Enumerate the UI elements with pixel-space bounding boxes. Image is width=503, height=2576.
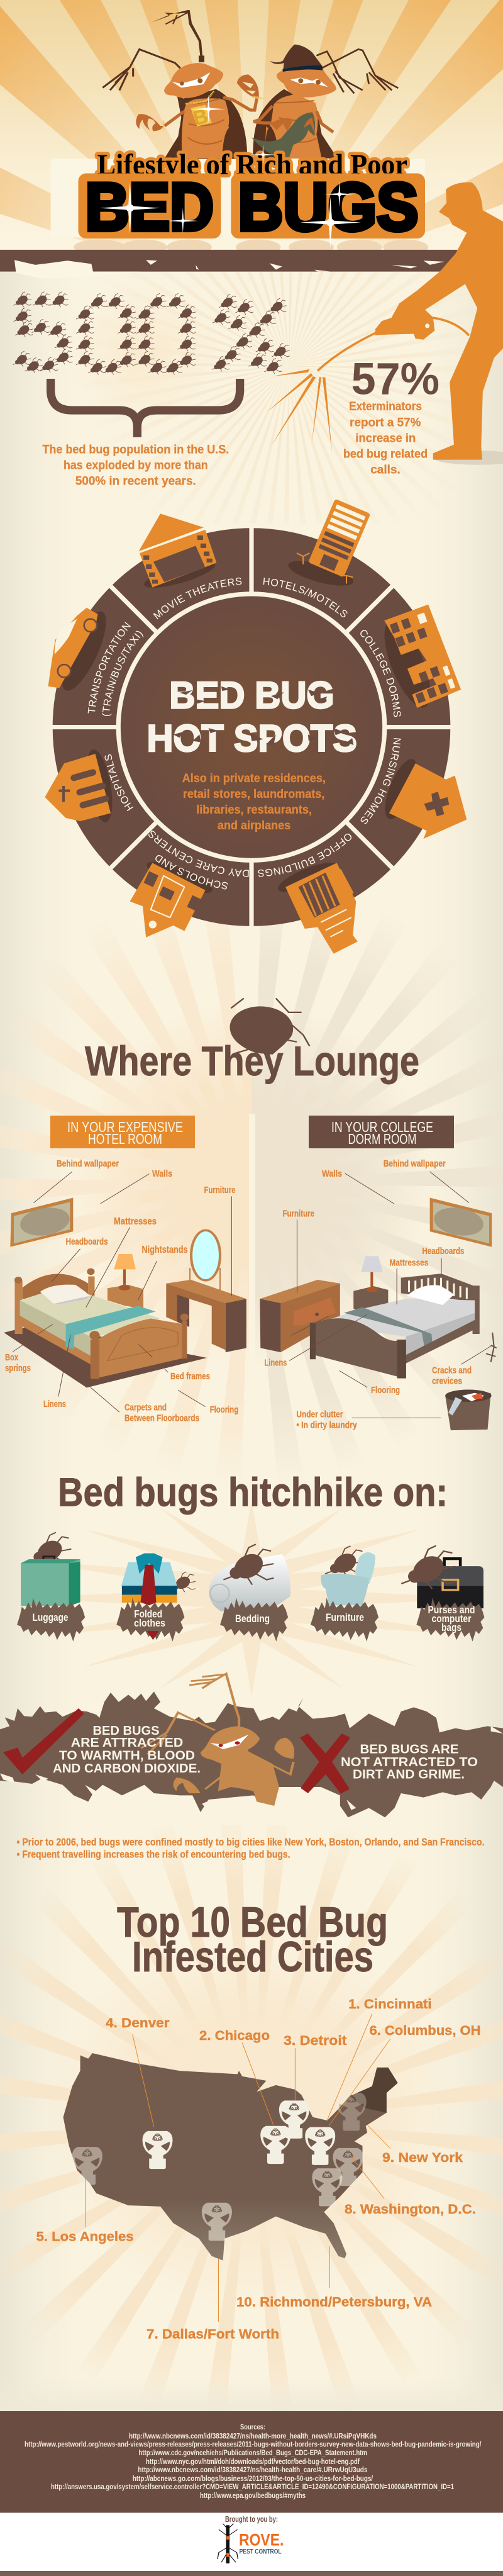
sources panel: [0, 2411, 503, 2513]
city labels: 6. Columbus, OH: [370, 2024, 480, 2038]
item: folded clothes: [121, 1554, 196, 1605]
city labels: 8. Washington, D.C.: [345, 2202, 476, 2217]
hotel room labels: Walls: [152, 1168, 172, 1179]
500 percent made of bugs: [13, 292, 290, 374]
dorm room labels: [264, 1158, 472, 1431]
57 percent caption: Exterminators: [349, 400, 422, 413]
500 percent caption: has exploded by more than: [64, 458, 208, 472]
left room: bed: [14, 1268, 189, 1379]
where they lounge artwork: [4, 999, 497, 1430]
city labels: 9. New York: [382, 2151, 463, 2165]
heading: bed bug hot spots: BED BUG: [169, 675, 334, 717]
wheel ring and hub: [50, 526, 453, 929]
right room: dresser: [260, 1280, 340, 1352]
right room: picture: [430, 1198, 492, 1247]
spray lines: [266, 369, 332, 452]
dorm room labels: Headboards: [422, 1246, 464, 1257]
500 percent caption: 500% in recent years.: [75, 474, 196, 488]
dorm room labels: • In dirty laundry: [296, 1420, 357, 1431]
poor bed bug character: [252, 45, 398, 159]
heading distress marks: [174, 686, 353, 746]
exterminator silhouette: [318, 182, 503, 465]
torn label: [311, 1598, 379, 1642]
title: bed bugs: BED: [86, 169, 214, 244]
dorm room labels: Behind wallpaper: [384, 1158, 446, 1169]
right room: laundry basket: [445, 1389, 492, 1430]
left room: vanity with mirror: [166, 1230, 246, 1352]
label: transportation: (TRAIN/BUS/TAXI): [102, 630, 143, 716]
57 percent stat: 57%: [351, 354, 439, 405]
hotel room labels: Box: [5, 1352, 18, 1363]
sources panel: http://www.cdc.gov/nceh/ehs/Publications/Bed_Bugs_CDC-EPA_Statement.htm: [138, 2450, 367, 2457]
hotel room labels: Mattresses: [114, 1216, 157, 1227]
icon: hospital: [45, 748, 117, 824]
hotel room labels: Furniture: [204, 1185, 235, 1196]
hotel room labels: Flooring: [210, 1404, 238, 1415]
hub caption: libraries, restaurants,: [196, 803, 312, 817]
hitchhike item labels: Purses and: [428, 1604, 475, 1616]
footer strip: [0, 2571, 503, 2576]
hub caption: Also in private residences,: [182, 771, 326, 785]
orange bed bug peeking from band: [141, 1674, 294, 1806]
icon: college dorms: [375, 605, 461, 713]
hitchhike item labels: [33, 1604, 475, 1633]
band tears: [0, 1726, 503, 1810]
rich bed bug character: [102, 10, 263, 159]
icon: movie theater: [138, 513, 218, 593]
torn label: [116, 1598, 184, 1642]
right room leader lines: [289, 1172, 492, 1418]
logo wordmark: ROVE.: [239, 2531, 284, 2550]
maine shading: [350, 2068, 398, 2113]
icon: large bed bug: [230, 999, 309, 1055]
dorm room banner: IN YOUR COLLEGE: [331, 1119, 433, 1135]
hitchhike item labels: bags: [441, 1621, 462, 1633]
hub caption: [182, 771, 326, 832]
hitchhike item labels: Luggage: [33, 1611, 68, 1623]
hotel room labels: Between Floorboards: [124, 1413, 199, 1423]
57 percent caption: report a 57%: [350, 416, 421, 430]
attracted statement: [53, 1724, 201, 1776]
hitchhike item labels: Folded: [134, 1608, 162, 1620]
57 percent caption: calls.: [370, 463, 401, 477]
attracted statement: TO WARMTH, BLOOD: [59, 1749, 195, 1763]
left room: lamp and nightstand: [108, 1254, 143, 1309]
heading: where they lounge: Where They Lounge: [85, 1038, 419, 1084]
sources panel: http://www.nbcnews.com/id/38382427/ns/health-more_health_news/#.URsiPqVHKds: [129, 2433, 377, 2440]
label: hospitals: HOSPITALS: [104, 754, 133, 812]
reflection under title: [74, 240, 428, 255]
label: college dorms: COLLEGE DORMS: [360, 630, 401, 717]
hot spots wheel: [45, 500, 467, 954]
label: schools and day care centers: DAY CARE CENTERS: [148, 831, 249, 877]
torn label: [220, 1598, 288, 1642]
label: hotels/motels: HOTELS/MOTELS: [263, 578, 347, 618]
header section: [0, 145, 503, 488]
heading: top 10 bed bug infested cities: Top 10 Bed Bug: [117, 1898, 388, 1946]
city labels: 5. Los Angeles: [36, 2230, 134, 2244]
us map: [64, 2014, 398, 2322]
57 percent caption: [343, 400, 428, 477]
title: bed bugs: [86, 169, 418, 244]
logo tagline: PEST CONTROL: [240, 2548, 282, 2556]
dorm room labels: Cracks and: [432, 1365, 472, 1376]
torn brown band: [0, 1691, 503, 1817]
label: transportation: TRANSPORTATION: [88, 622, 131, 714]
dorm room banner: DORM ROOM: [348, 1131, 416, 1147]
not attracted statement: DIRT AND GRIME.: [353, 1767, 465, 1781]
bed bug characters: [102, 10, 398, 159]
map outline: [64, 2053, 398, 2261]
hotel room banner: IN YOUR EXPENSIVE: [67, 1119, 183, 1135]
rich bed bug character: B: [191, 104, 210, 130]
icon: school: [130, 856, 216, 938]
left room: picture: [10, 1198, 73, 1247]
heading: bed bugs hitchhike on: Bed bugs hitchhike on:: [58, 1470, 448, 1515]
city labels: 1. Cincinnati: [348, 1997, 432, 2012]
right room: lamp and nightstand: [353, 1256, 388, 1311]
dorm room labels: Walls: [322, 1168, 342, 1179]
dorm room labels: Linens: [264, 1358, 287, 1368]
hotel room labels: Carpets and: [124, 1402, 167, 1413]
cream panel behind title: [51, 159, 425, 238]
item: bedding: [209, 1544, 290, 1611]
item: purses and computer bags: [401, 1546, 484, 1608]
icon: office building: [275, 857, 358, 954]
attracted statement: BED BUGS: [93, 1724, 160, 1738]
not attracted statement: [341, 1743, 478, 1781]
hitchhike item labels: Furniture: [326, 1611, 364, 1623]
sources panel: Sources:: [240, 2424, 265, 2431]
torn label: [416, 1598, 484, 1642]
heading: bed bug hot spots: HOT SPOTS: [147, 717, 357, 759]
sources panel: http://abcnews.go.com/blogs/business/2012/03/the-top-50-us-cities-for-bed-bugs/: [133, 2475, 373, 2483]
heading: top 10 bed bug infested cities: Infested Cities: [132, 1933, 373, 1981]
torn band with bug and marks: [0, 1674, 503, 1817]
hotel room labels: Bed frames: [170, 1371, 210, 1382]
icon: hotel: [286, 499, 370, 591]
hotel room banner: HOTEL ROOM: [88, 1131, 162, 1147]
attracted statement: ARE ATTRACTED: [71, 1736, 183, 1750]
sources panel: http://www.epa.gov/bedbugs/#myths: [200, 2492, 306, 2500]
city labels: 3. Detroit: [284, 2034, 347, 2048]
right room: bed: [310, 1274, 480, 1379]
city labels: 4. Denver: [106, 2016, 170, 2030]
hotel room labels: springs: [5, 1363, 31, 1374]
dorm room labels: crevices: [432, 1375, 462, 1387]
dorm room labels: Mattresses: [389, 1258, 428, 1268]
heading: bed bug hot spots: [147, 675, 357, 759]
57 percent caption: increase in: [355, 432, 416, 445]
sponsor panel: [0, 2513, 503, 2571]
500 percent caption: The bed bug population in the U.S.: [42, 442, 229, 456]
brown divider bar: [0, 250, 503, 279]
hitchhike starburst: [13, 1501, 490, 1696]
title backing plates: [78, 174, 425, 238]
attracted statement: AND CARBON DIOXIDE.: [53, 1762, 201, 1776]
city labels: [36, 1997, 481, 2342]
checkmark: [3, 1708, 84, 1774]
item: furniture: [321, 1546, 375, 1605]
bullet facts: [16, 1836, 484, 1861]
label: office buildings: OFFICE BUILDINGS: [258, 833, 352, 877]
not attracted statement: BED BUGS ARE: [360, 1743, 459, 1757]
dorm room labels: Furniture: [283, 1208, 314, 1219]
label: nursing homes: NURSING HOMES: [361, 738, 401, 824]
hitchhike item labels: computer: [431, 1613, 472, 1625]
city labels: 7. Dallas/Fort Worth: [146, 2327, 279, 2342]
left room: rug: [4, 1324, 207, 1387]
city labels: 10. Richmond/Petersburg, VA: [236, 2295, 432, 2309]
sponsor panel: Brought to you by:: [225, 2514, 278, 2524]
city labels: 2. Chicago: [199, 2029, 270, 2043]
hotel room labels: Headboards: [66, 1236, 108, 1247]
dorm room banner: [309, 1116, 454, 1148]
hotel room banner: [50, 1116, 195, 1148]
hotel room labels: [5, 1158, 238, 1423]
hitchhike item labels: Bedding: [235, 1613, 270, 1625]
bullet facts: • Frequent travelling increases the risk of encountering bed bugs.: [16, 1849, 290, 1861]
heading: top 10 bed bug infested cities: [117, 1898, 388, 1981]
left room leader lines: [13, 1172, 231, 1412]
label: schools and day care centers: SCHOOLS AND: [155, 854, 228, 890]
curly brace: [51, 379, 240, 437]
hitchhike items artwork: [17, 1532, 484, 1642]
sources panel: http://www.nbcnews.com/id/38382427/ns/health-health_care/#.URrwUqU3uds: [138, 2467, 367, 2474]
tie tip: [147, 1631, 159, 1640]
label: movie theaters: MOVIE THEATERS: [153, 578, 241, 619]
city leader lines: [86, 2014, 390, 2322]
sparkles on title: [99, 145, 361, 248]
hotel room labels: Behind wallpaper: [57, 1158, 119, 1169]
500 percent caption: [42, 442, 229, 488]
dorm room labels: Flooring: [371, 1385, 400, 1396]
hub caption: and airplanes: [218, 819, 290, 832]
logo: rove beetle: [218, 2524, 238, 2563]
hitchhike item labels: clothes: [134, 1617, 165, 1629]
dorm room labels: Under clutter: [296, 1409, 343, 1420]
57 percent caption: bed bug related: [343, 447, 428, 461]
hotel room labels: Nightstands: [142, 1245, 188, 1255]
title: bed bugs: BUGS: [238, 169, 418, 244]
item: luggage: [21, 1532, 80, 1606]
right room: crack: [486, 1333, 497, 1362]
gas mask markers: [72, 2093, 367, 2241]
icon: nursing home: [379, 755, 467, 839]
x mark: [300, 1733, 350, 1794]
title: lifestyle of rich and poor: Lifestyle of Rich and Poor: [97, 148, 407, 181]
hotel room labels: Linens: [43, 1399, 66, 1409]
hub caption: retail stores, laundromats,: [183, 787, 324, 801]
sources panel: http://www.nyc.gov/html/doh/downloads/pdf/vector/bed-bug-hotel-eng.pdf: [146, 2458, 360, 2466]
icon: car: [48, 606, 114, 696]
not attracted statement: NOT ATTRACTED TO: [341, 1756, 478, 1769]
torn label: [17, 1598, 85, 1642]
